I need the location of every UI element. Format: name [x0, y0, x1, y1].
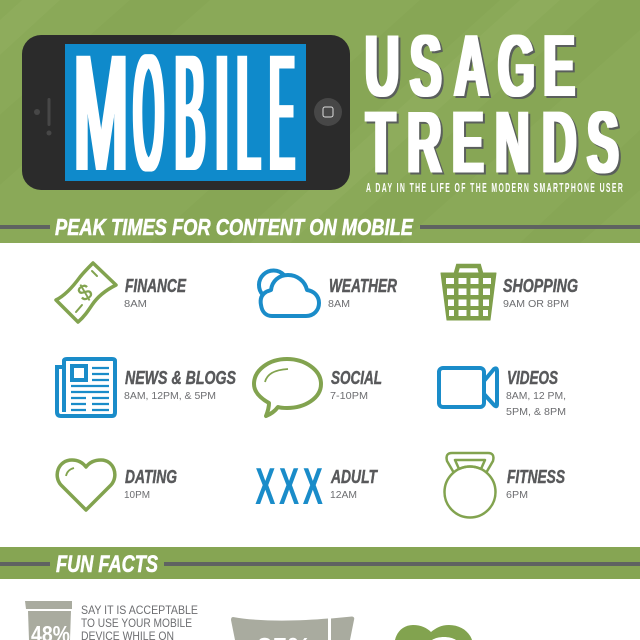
item: videos: VIDEOS [507, 368, 558, 388]
icon: video camera [439, 368, 497, 407]
phone title: MOBILE: M [74, 21, 128, 206]
phone title: MOBILE: O [134, 21, 163, 206]
fact text: TO USE YOUR MOBILE [81, 616, 192, 630]
item: fitness: FITNESS [507, 467, 565, 487]
title: usage trends [365, 16, 619, 191]
phone title: MOBILE [0, 0, 640, 240]
icon: cloud [259, 270, 319, 316]
fact: 48 percent [25, 601, 198, 640]
icon: cup [25, 601, 72, 640]
item: fitness: 6PM [506, 489, 528, 501]
item: news and blogs [57, 359, 236, 416]
icon: newspaper [57, 359, 115, 416]
section heading: peak times: PEAK TIMES FOR CONTENT ON MOBILE [55, 214, 414, 240]
item: adult [255, 459, 379, 516]
header banner [0, 0, 640, 243]
phone illustration [0, 0, 640, 240]
fact text: SAY IT IS ACCEPTABLE [81, 603, 198, 617]
item: dating [57, 460, 177, 510]
icon: kettlebell [444, 453, 496, 518]
item: adult: 12AM [330, 489, 357, 501]
item: videos: 8AM, 12 PM, [506, 390, 566, 402]
item: weather: WEATHER [329, 276, 397, 296]
item: dating: DATING [125, 467, 177, 487]
item: videos [439, 368, 566, 418]
item: adult: ADULT [330, 467, 379, 487]
title line: USAGE: USAGE [365, 16, 575, 115]
item: shopping [441, 266, 578, 320]
phone title: MOBILE: E [270, 21, 294, 206]
subtitle: A DAY IN THE LIFE OF THE MODERN SMARTPHONE USER [366, 182, 623, 196]
phone title: MOBILE: L [237, 21, 260, 206]
item: weather [259, 270, 397, 316]
item: news and blogs: NEWS & BLOGS [125, 368, 236, 388]
item: weather: 8AM [328, 298, 350, 310]
item: fitness [444, 453, 565, 518]
fact text [81, 603, 198, 640]
icon: heart [57, 460, 115, 510]
phone screen [65, 44, 306, 181]
icon: basket [441, 266, 496, 320]
item: finance: 8AM [124, 298, 147, 310]
item: social: SOCIAL [331, 368, 382, 388]
phone home button [314, 98, 342, 126]
phone title: MOBILE: B [174, 21, 204, 206]
icon: xxx: XXX [255, 459, 323, 516]
item: finance [56, 263, 187, 322]
item: news and blogs: 8AM, 12PM, & 5PM [124, 390, 216, 402]
item: videos: 5PM, & 8PM [506, 406, 566, 418]
fact: green heart [395, 625, 472, 640]
phone title: MOBILE: I [215, 21, 229, 206]
item: shopping: 9AM OR 8PM [503, 298, 569, 310]
item: social [254, 359, 382, 416]
item: finance: FINANCE [125, 276, 187, 296]
item: shopping: SHOPPING [503, 276, 578, 296]
phone speaker and sensors [34, 98, 52, 136]
item: dating: 10PM [124, 489, 150, 501]
section heading: fun facts [0, 547, 640, 579]
fact: pillow graphic [231, 616, 354, 640]
section heading: fun facts: FUN FACTS [56, 551, 158, 578]
icon: money: $ [73, 279, 96, 306]
item: social: 7-10PM [330, 390, 368, 402]
title line: TRENDS: TRENDS [366, 93, 619, 191]
icon: speech bubble [254, 359, 321, 416]
